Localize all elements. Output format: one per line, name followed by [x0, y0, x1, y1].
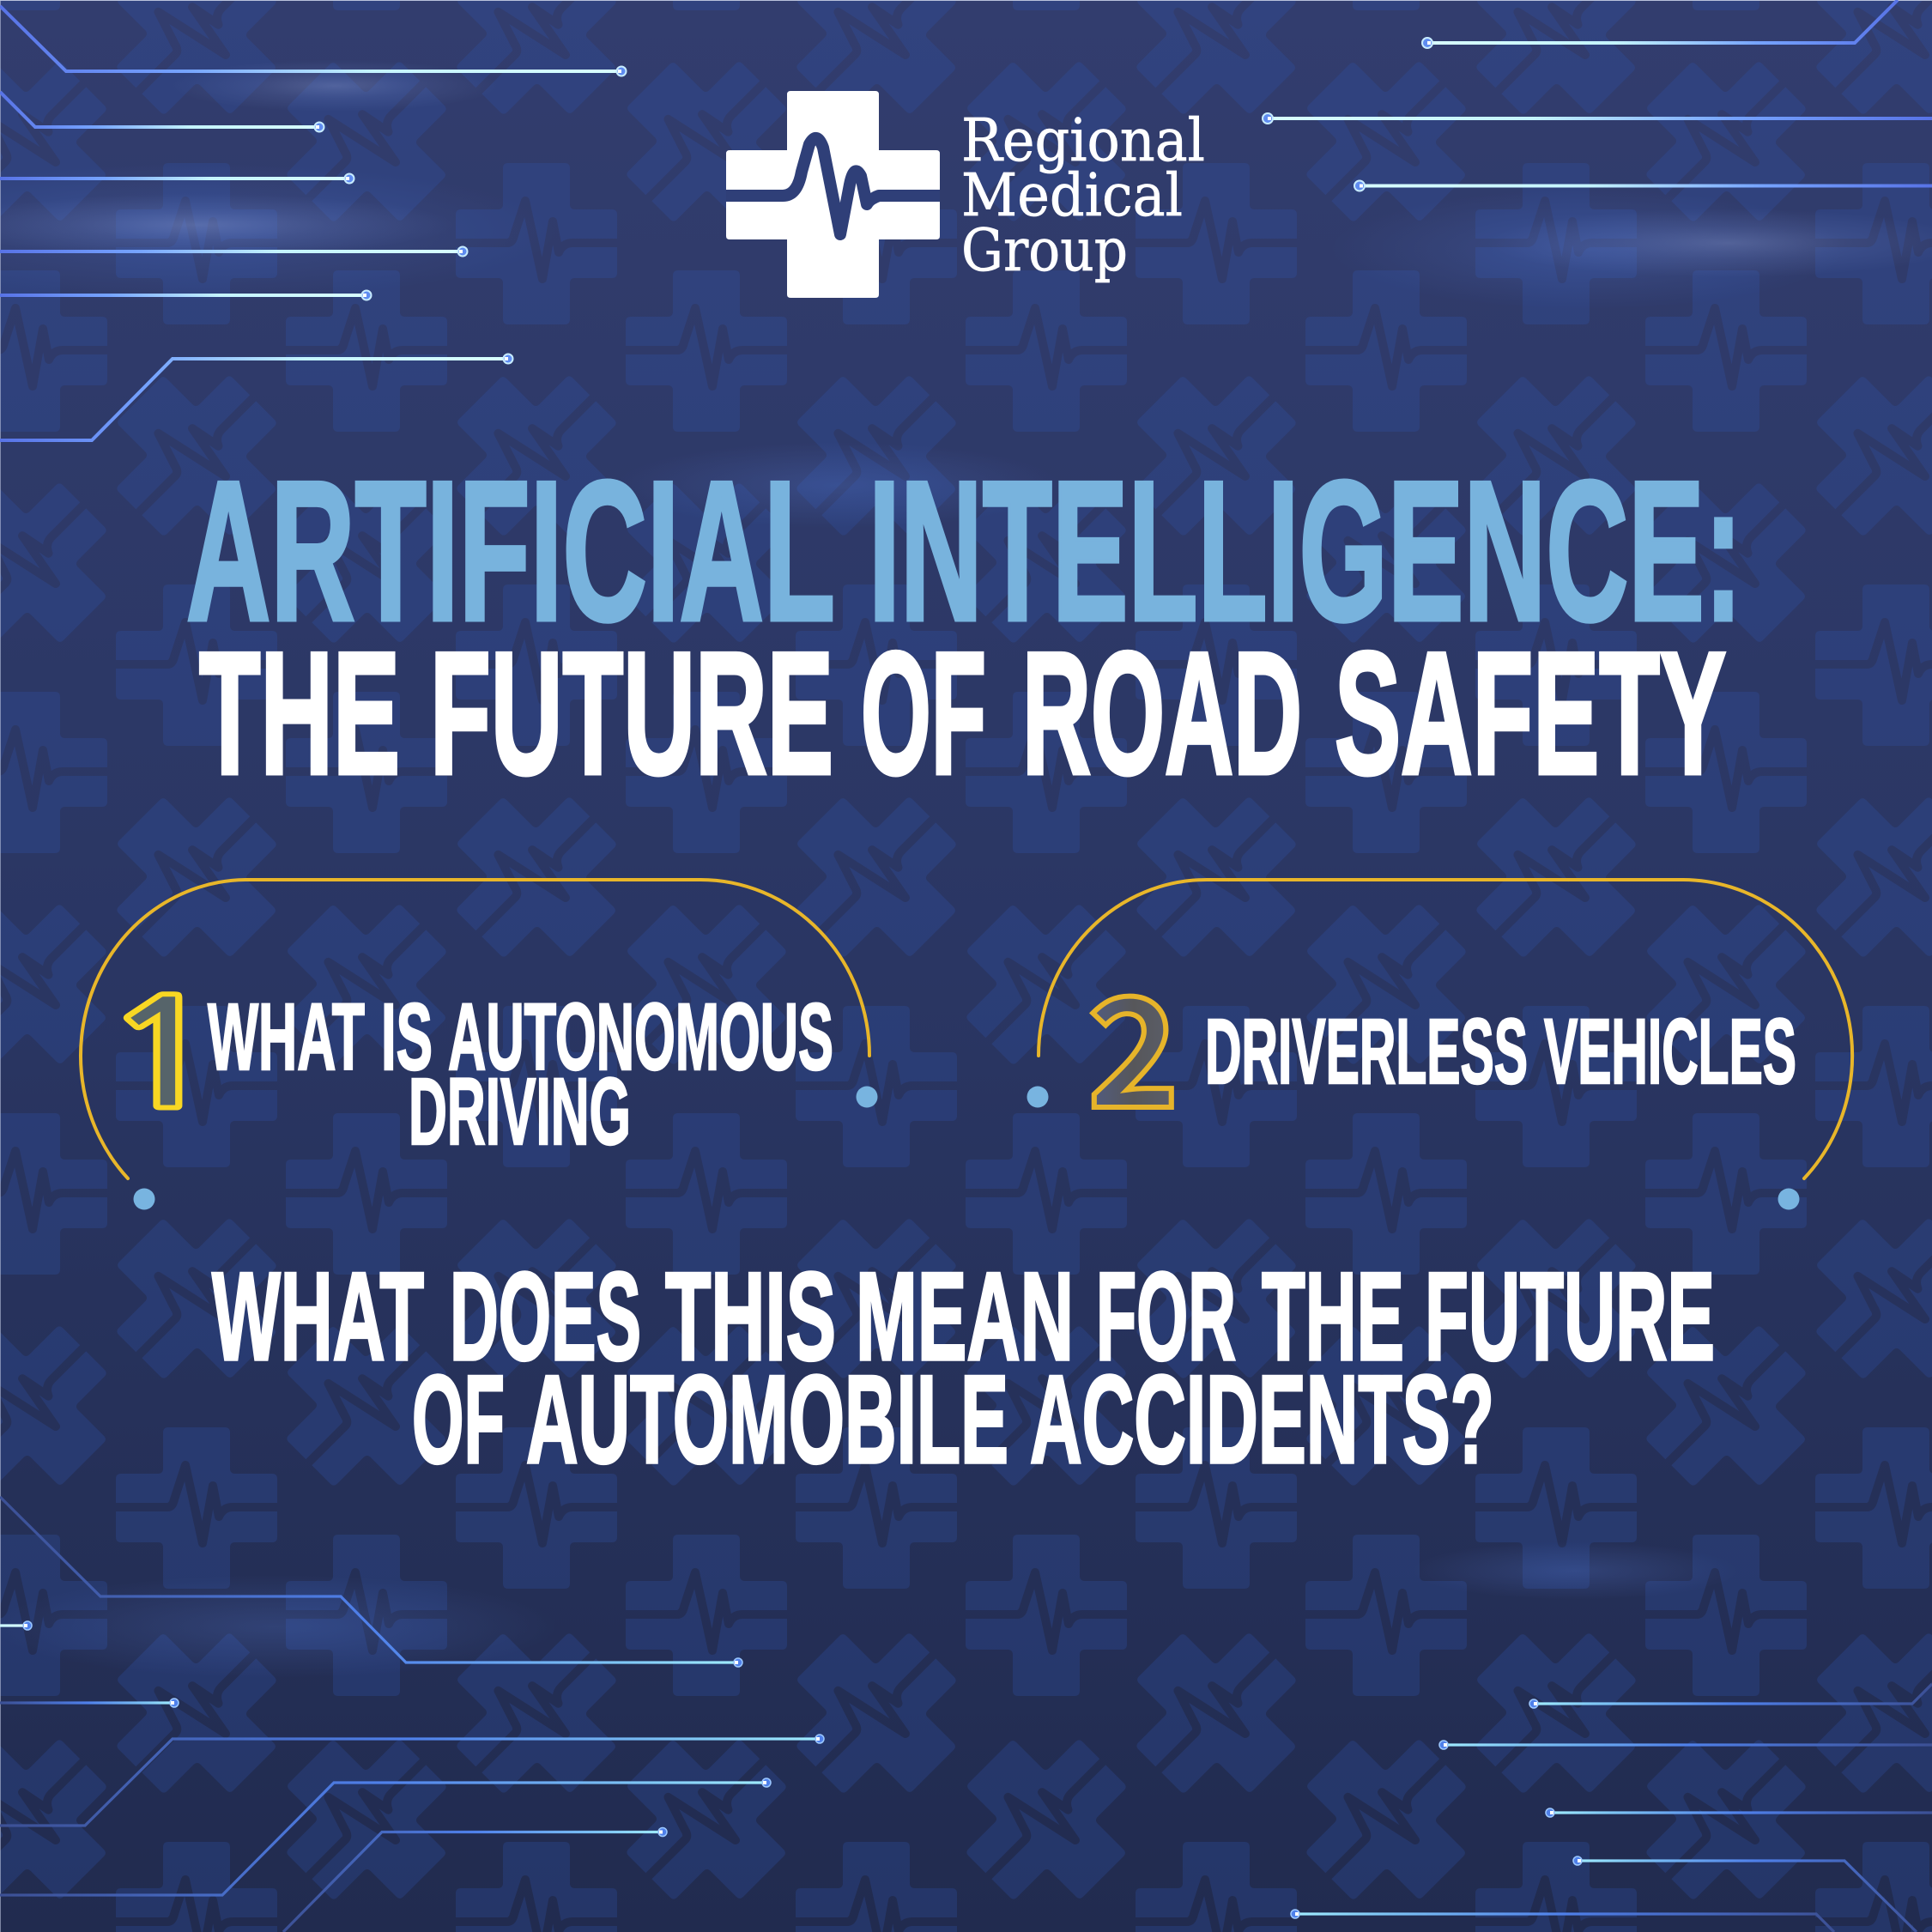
- circuit lines bottom left: [0, 1497, 824, 1932]
- dot: [1027, 1087, 1049, 1107]
- item 1 heading: IS: [381, 984, 433, 1090]
- closing question: THE: [1262, 1246, 1404, 1386]
- circuit lines bottom right: [1291, 1684, 1932, 1932]
- closing question: AUTOMOBILE: [526, 1349, 1008, 1489]
- circuit lines top left: [0, 6, 627, 440]
- closing question: THIS: [665, 1246, 836, 1386]
- title line 2: THE: [199, 616, 400, 811]
- title line 2: ROAD: [1022, 616, 1302, 811]
- panel: item 2: [1027, 880, 1852, 1210]
- item 1 heading: AUTONOMOUS: [448, 984, 833, 1090]
- closing question: FUTURE: [1425, 1246, 1715, 1386]
- closing question: DOES: [450, 1246, 641, 1386]
- closing question: WHAT: [212, 1246, 424, 1386]
- logo text: Medical: [961, 162, 1183, 230]
- item 2 heading: DRIVERLESS: [1205, 999, 1528, 1103]
- number 2: 2: [1087, 932, 1179, 1151]
- title line 2: OF: [861, 616, 986, 811]
- arc frame 2: [1039, 880, 1852, 1178]
- logo: [726, 91, 1205, 298]
- panel: item 1: [81, 880, 878, 1210]
- title: [186, 440, 1742, 811]
- closing question: ACCIDENTS?: [1030, 1349, 1494, 1489]
- closing question: OF: [412, 1349, 505, 1489]
- number 1: 1: [100, 982, 226, 1130]
- item 1 heading: WHAT: [208, 984, 365, 1090]
- item 1 heading: DRIVING: [409, 1059, 631, 1165]
- dot: [857, 1087, 877, 1107]
- logo text: Regional: [961, 107, 1205, 175]
- logo text: [961, 107, 1205, 285]
- item 1 heading: [208, 984, 833, 1165]
- icon: medical cross with pulse line: [726, 91, 940, 298]
- circuit lines top right: [1263, 0, 1932, 191]
- title line 1: ARTIFICIAL: [186, 440, 835, 663]
- arc frame 1: [81, 880, 869, 1178]
- title line 2: [199, 616, 1726, 811]
- closing question: FOR: [1096, 1246, 1236, 1386]
- logo text: Group: [961, 217, 1128, 285]
- closing question: [212, 1246, 1715, 1489]
- title line 2: FUTURE: [430, 616, 833, 811]
- dot: [134, 1188, 154, 1210]
- closing question: MEAN: [856, 1246, 1074, 1386]
- dot: [1778, 1188, 1799, 1210]
